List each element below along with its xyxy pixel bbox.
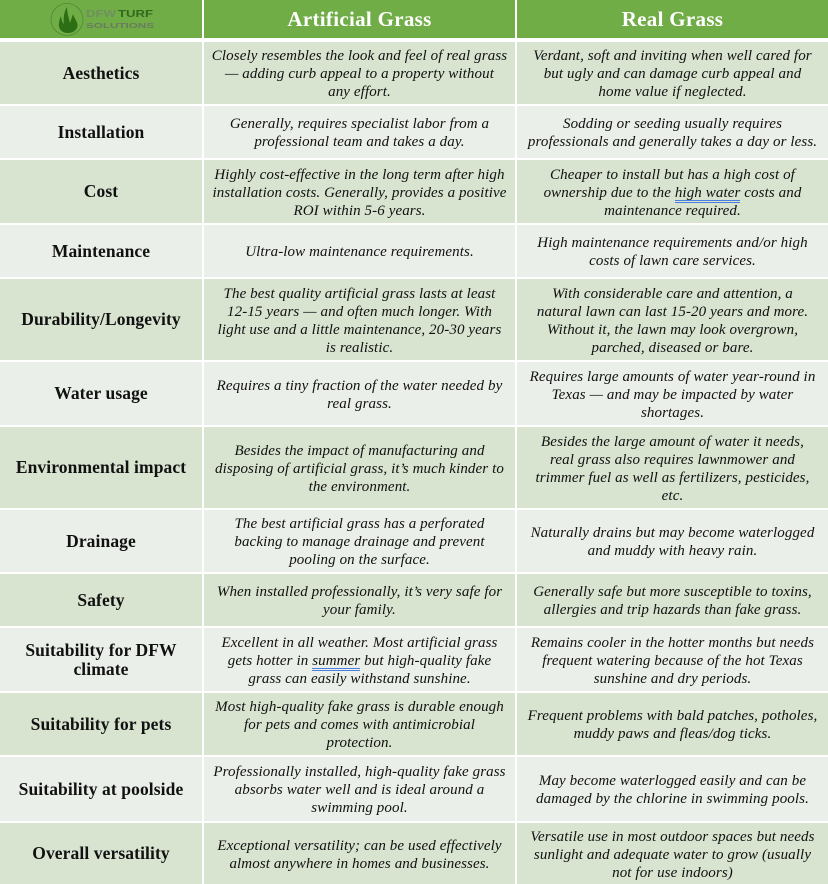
- real: Installation: [517, 106, 828, 158]
- real: Aesthetics: [517, 42, 828, 104]
- row label: Durability/Longevity: Durability/Longevity: [21, 309, 181, 329]
- header: logo cell: [0, 0, 202, 38]
- artificial: Suitability for pets: Most high-quality fake grass is durable enough: [215, 699, 504, 715]
- icon: DFW Turf Solutions logo: SOLUTIONS: [86, 23, 155, 30]
- artificial: Drainage: [204, 510, 515, 572]
- real: Suitability for pets: Frequent problems with bald patches, potholes,: [528, 708, 817, 724]
- artificial: Suitability at poolside: [204, 757, 515, 821]
- real: Drainage: and muddy with heavy rain.: [588, 543, 757, 559]
- row label: Suitability for DFW climate: climate: [73, 658, 129, 678]
- artificial: Suitability for pets: [204, 693, 515, 755]
- real: Durability/Longevity: natural lawn can last 15-20 years and more.: [537, 304, 808, 320]
- real: Maintenance: costs of lawn care services.: [589, 253, 756, 269]
- artificial: Aesthetics: — adding curb appeal to a property without: [225, 66, 494, 82]
- real: Aesthetics: home value if neglected.: [598, 84, 747, 100]
- row label: Suitability for DFW climate: [0, 628, 202, 691]
- real: Safety: allergies and trip hazards than fake grass.: [544, 602, 801, 618]
- artificial: Overall versatility: [204, 823, 515, 884]
- heading: Artificial Grass: Artificial Grass: [287, 7, 432, 31]
- real: Environmental impact: real grass also requires lawnmower and: [550, 452, 795, 468]
- artificial: Safety: When installed professionally, it’s very safe for: [217, 584, 502, 600]
- real: Overall versatility: not for use indoors): [612, 864, 733, 880]
- artificial: Safety: your family.: [323, 602, 396, 618]
- row label: Overall versatility: Overall versatility: [32, 843, 170, 863]
- artificial: Durability/Longevity: [204, 279, 515, 360]
- artificial: Cost: [204, 160, 515, 223]
- row label: Water usage: Water usage: [54, 383, 148, 403]
- row label: Suitability for pets: Suitability for pets: [31, 714, 171, 734]
- artificial: Maintenance: [204, 225, 515, 277]
- heading: Artificial Grass: [204, 0, 515, 38]
- artificial: Durability/Longevity: The best quality artificial grass lasts at least: [224, 286, 495, 302]
- real: Installation: professionals and generally takes a day or less.: [528, 134, 817, 150]
- real: Suitability for DFW climate: frequent watering because of the hot Texas: [542, 652, 803, 668]
- row label: Aesthetics: Aesthetics: [63, 62, 139, 82]
- artificial: Safety: [204, 574, 515, 626]
- artificial: Durability/Longevity: 12-15 years — and often much longer. With: [227, 304, 492, 320]
- real: Cost: maintenance required.: [604, 202, 741, 218]
- artificial: Suitability for pets: for pets and comes with antimicrobial: [244, 717, 475, 733]
- real: Environmental impact: [517, 427, 828, 508]
- artificial: Water usage: Requires a tiny fraction of the water needed by: [217, 378, 502, 394]
- artificial: Overall versatility: almost anywhere in homes and businesses.: [229, 856, 490, 872]
- artificial: Durability/Longevity: light use and a little maintenance, 20-30 years: [218, 322, 501, 338]
- row label: Durability/Longevity: [0, 279, 202, 360]
- real: Maintenance: [517, 225, 828, 277]
- row label: Overall versatility: [0, 823, 202, 884]
- real: Cost: ownership due to the high water costs and: [544, 184, 801, 200]
- artificial: Aesthetics: any effort.: [328, 84, 391, 100]
- heading: Real Grass: [517, 0, 828, 38]
- artificial: Drainage: The best artificial grass has a perforated: [234, 516, 485, 532]
- artificial: Environmental impact: [204, 427, 515, 508]
- real: Water usage: Requires large amounts of water year-round in: [530, 368, 815, 384]
- real: Water usage: shortages.: [641, 404, 704, 420]
- artificial: Environmental impact: disposing of artificial grass, it’s much kinder to: [215, 460, 504, 476]
- real: Durability/Longevity: [517, 279, 828, 360]
- real: Drainage: Naturally drains but may become waterlogged: [531, 525, 814, 541]
- row label: Cost: Cost: [84, 181, 118, 201]
- icon: DFW Turf Solutions logo: TURF: [118, 9, 153, 20]
- artificial: Environmental impact: Besides the impact of manufacturing and: [234, 442, 485, 458]
- real: Environmental impact: etc.: [662, 488, 683, 504]
- artificial: Suitability for DFW climate: Excellent in all weather. Most artificial grass: [222, 634, 497, 650]
- artificial: Water usage: real grass.: [327, 396, 392, 412]
- real: Water usage: [517, 362, 828, 425]
- artificial: Suitability for DFW climate: grass can easily withstand sunshine.: [248, 670, 471, 686]
- row label: Suitability for DFW climate: Suitability for DFW: [25, 640, 177, 660]
- artificial: Cost: Highly cost-effective in the long term after high: [214, 166, 505, 182]
- real: Aesthetics: but ugly and can damage curb appeal and: [544, 66, 801, 82]
- row label: Aesthetics: [0, 42, 202, 104]
- row label: Suitability for pets: [0, 693, 202, 755]
- real: Suitability at poolside: [517, 757, 828, 821]
- real: Water usage: Texas — and may be impacted by water: [552, 386, 793, 402]
- artificial: Water usage: [204, 362, 515, 425]
- artificial: Suitability at poolside: swimming pool.: [311, 800, 408, 816]
- artificial: Suitability for DFW climate: gets hotter in summer but high-quality fake: [228, 652, 491, 668]
- row label: Safety: [0, 574, 202, 626]
- real: Suitability at poolside: May become waterlogged easily and can be: [539, 773, 806, 789]
- real: Overall versatility: sunlight and adequate water to grow (usually: [534, 846, 811, 862]
- artificial: Suitability at poolside: Professionally installed, high-quality fake grass: [213, 764, 506, 780]
- real: Environmental impact: trimmer fuel as well as fertilizers, pesticides,: [536, 470, 809, 486]
- real: Cost: Cheaper to install but has a high cost of: [550, 166, 795, 182]
- row label: Environmental impact: Environmental impact: [16, 457, 186, 477]
- icon: DFW Turf Solutions logo: [50, 3, 155, 36]
- row label: Drainage: [0, 510, 202, 572]
- row label: Safety: Safety: [77, 590, 125, 610]
- artificial: Overall versatility: Exceptional versatility; can be used effectively: [217, 838, 502, 854]
- row label: Suitability at poolside: Suitability at poolside: [19, 778, 183, 798]
- real: Cost: [517, 160, 828, 223]
- artificial: Drainage: pooling on the surface.: [289, 552, 430, 568]
- row label: Installation: [0, 106, 202, 158]
- real: Overall versatility: Versatile use in most outdoor spaces but needs: [530, 828, 815, 844]
- real: Suitability for pets: muddy paws and fleas/dog ticks.: [574, 726, 771, 742]
- row label: Installation: Installation: [58, 122, 144, 142]
- artificial: Aesthetics: Closely resembles the look and feel of real grass: [212, 48, 507, 64]
- real: Environmental impact: Besides the large amount of water it needs,: [541, 434, 804, 450]
- real: Durability/Longevity: parched, diseased or bare.: [592, 340, 753, 356]
- artificial: Cost: installation costs. Generally, provides a positive: [212, 184, 506, 200]
- artificial: Suitability for pets: protection.: [327, 735, 392, 751]
- real: Suitability for DFW climate: sunshine and dry periods.: [594, 670, 751, 686]
- artificial: Suitability at poolside: absorbs water well and is ideal around a: [235, 782, 484, 798]
- real: Safety: Generally safe but more susceptible to toxins,: [533, 584, 812, 600]
- real: Aesthetics: Verdant, soft and inviting when well cared for: [533, 48, 812, 64]
- real: Durability/Longevity: With considerable care and attention, a: [552, 286, 793, 302]
- row label: Maintenance: [0, 225, 202, 277]
- real: Suitability for DFW climate: Remains cooler in the hotter months but needs: [531, 634, 814, 650]
- artificial: Suitability for DFW climate: [204, 628, 515, 691]
- artificial: Aesthetics: [204, 42, 515, 104]
- row label: Maintenance: Maintenance: [52, 240, 150, 260]
- real: Installation: Sodding or seeding usually requires: [563, 116, 782, 132]
- row label: Cost: [0, 160, 202, 223]
- real: Maintenance: High maintenance requirements and/or high: [537, 235, 808, 251]
- artificial: Installation: [204, 106, 515, 158]
- row label: Water usage: [0, 362, 202, 425]
- real: Durability/Longevity: Without it, the lawn may look overgrown,: [547, 322, 798, 338]
- real: Suitability at poolside: damaged by the chlorine in swimming pools.: [536, 791, 809, 807]
- artificial: Installation: professional team and takes a day.: [254, 134, 465, 150]
- real: Suitability for pets: [517, 693, 828, 755]
- artificial: Environmental impact: the environment.: [309, 478, 410, 494]
- real: Drainage: [517, 510, 828, 572]
- heading: Real Grass: Real Grass: [622, 7, 723, 31]
- row label: Environmental impact: [0, 427, 202, 508]
- real: Suitability for DFW climate: [517, 628, 828, 691]
- artificial: Drainage: backing to manage drainage and prevent: [234, 534, 485, 550]
- artificial: Cost: ROI within 5-6 years.: [293, 202, 426, 218]
- artificial: Maintenance: Ultra-low maintenance requirements.: [245, 244, 474, 260]
- real: Overall versatility: [517, 823, 828, 884]
- row label: Drainage: Drainage: [66, 530, 136, 550]
- row label: Suitability at poolside: [0, 757, 202, 821]
- artificial: Installation: Generally, requires specialist labor from a: [230, 116, 489, 132]
- artificial: Durability/Longevity: is realistic.: [326, 340, 393, 356]
- real: Safety: [517, 574, 828, 626]
- icon: DFW Turf Solutions logo: DFW: [86, 9, 117, 20]
